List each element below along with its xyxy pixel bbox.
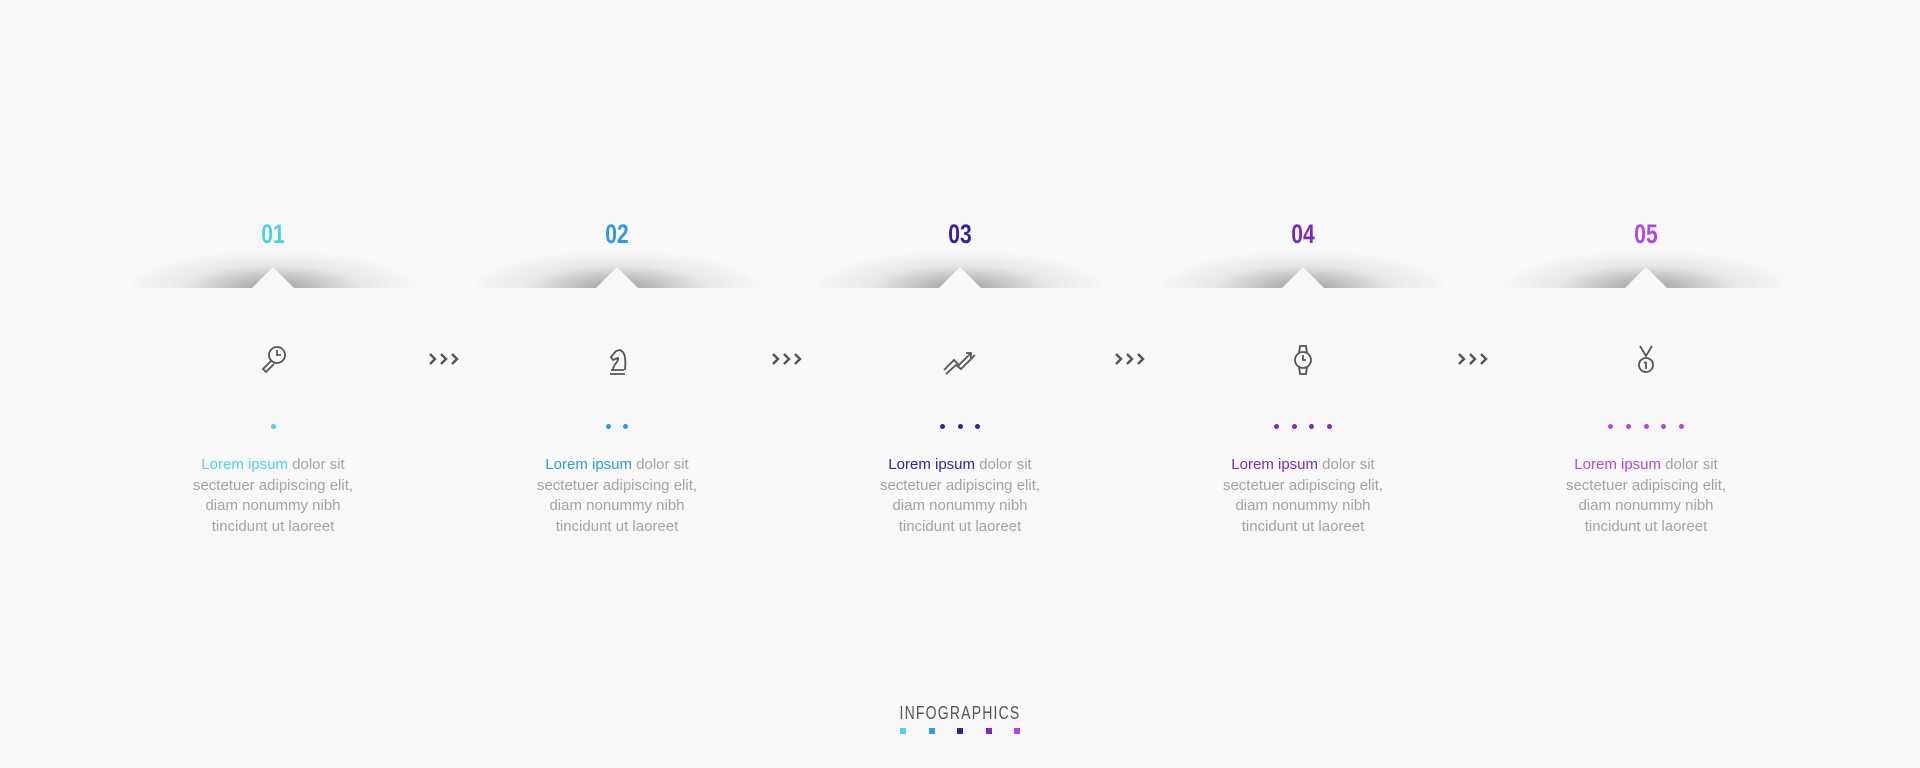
number 04: 04	[1291, 219, 1315, 249]
text: tincidunt ut laoreet	[212, 518, 334, 534]
shadow tab	[1158, 250, 1448, 288]
dots	[606, 424, 628, 429]
arrow 1	[429, 353, 459, 365]
step 4	[1186, 219, 1420, 534]
text: tincidunt ut laoreet	[1242, 518, 1364, 534]
shadow tab	[472, 250, 762, 288]
footer squares	[900, 728, 1020, 734]
text: sectetuer adipiscing elit,	[880, 476, 1040, 494]
number 05: 05	[1634, 219, 1658, 249]
step 2	[500, 219, 734, 534]
shadow tab	[815, 250, 1105, 288]
text: diam nonummy nibh	[1578, 497, 1714, 514]
text: diam nonummy nibh	[549, 497, 685, 514]
text: tincidunt ut laoreet	[899, 518, 1021, 534]
number 02: 02	[605, 219, 629, 249]
step 1	[156, 219, 390, 534]
text: sectetuer adipiscing elit,	[193, 476, 353, 494]
text: Lorem ipsum dolor sit	[1231, 456, 1375, 473]
arrow 3	[1115, 353, 1145, 365]
text: tincidunt ut laoreet	[556, 518, 678, 534]
text: sectetuer adipiscing elit,	[537, 476, 697, 494]
dots	[1608, 424, 1684, 429]
number 01: 01	[261, 219, 285, 249]
number 03: 03	[948, 219, 972, 249]
text: Lorem ipsum dolor sit	[1574, 456, 1718, 473]
text	[1566, 456, 1726, 534]
text: sectetuer adipiscing elit,	[1223, 476, 1383, 494]
text: diam nonummy nibh	[205, 497, 341, 514]
dots	[1274, 424, 1332, 429]
arrow 2	[772, 353, 802, 365]
text: diam nonummy nibh	[892, 497, 1028, 514]
shadow tab	[1501, 250, 1791, 288]
dots	[940, 424, 980, 429]
footer title: INFOGRAPHICS	[900, 703, 1020, 723]
text: Lorem ipsum dolor sit	[545, 456, 689, 473]
text: Lorem ipsum dolor sit	[888, 456, 1032, 473]
icon: watch	[1294, 345, 1312, 375]
icon: magnifier clock	[262, 346, 286, 374]
text: diam nonummy nibh	[1235, 497, 1371, 514]
text	[1223, 456, 1383, 534]
text	[880, 456, 1040, 534]
arrow 4	[1458, 353, 1488, 365]
text	[193, 456, 353, 534]
text: tincidunt ut laoreet	[1585, 518, 1707, 534]
shadow tab	[128, 250, 418, 288]
footer logo	[900, 703, 1020, 734]
icon: trend	[943, 352, 976, 375]
text: sectetuer adipiscing elit,	[1566, 476, 1726, 494]
step 3	[843, 219, 1078, 534]
icon: chess knight	[610, 349, 626, 375]
dots	[271, 424, 276, 429]
text	[537, 456, 697, 534]
text: Lorem ipsum dolor sit	[201, 456, 345, 473]
icon: medal	[1638, 346, 1654, 373]
step 5	[1529, 219, 1764, 534]
